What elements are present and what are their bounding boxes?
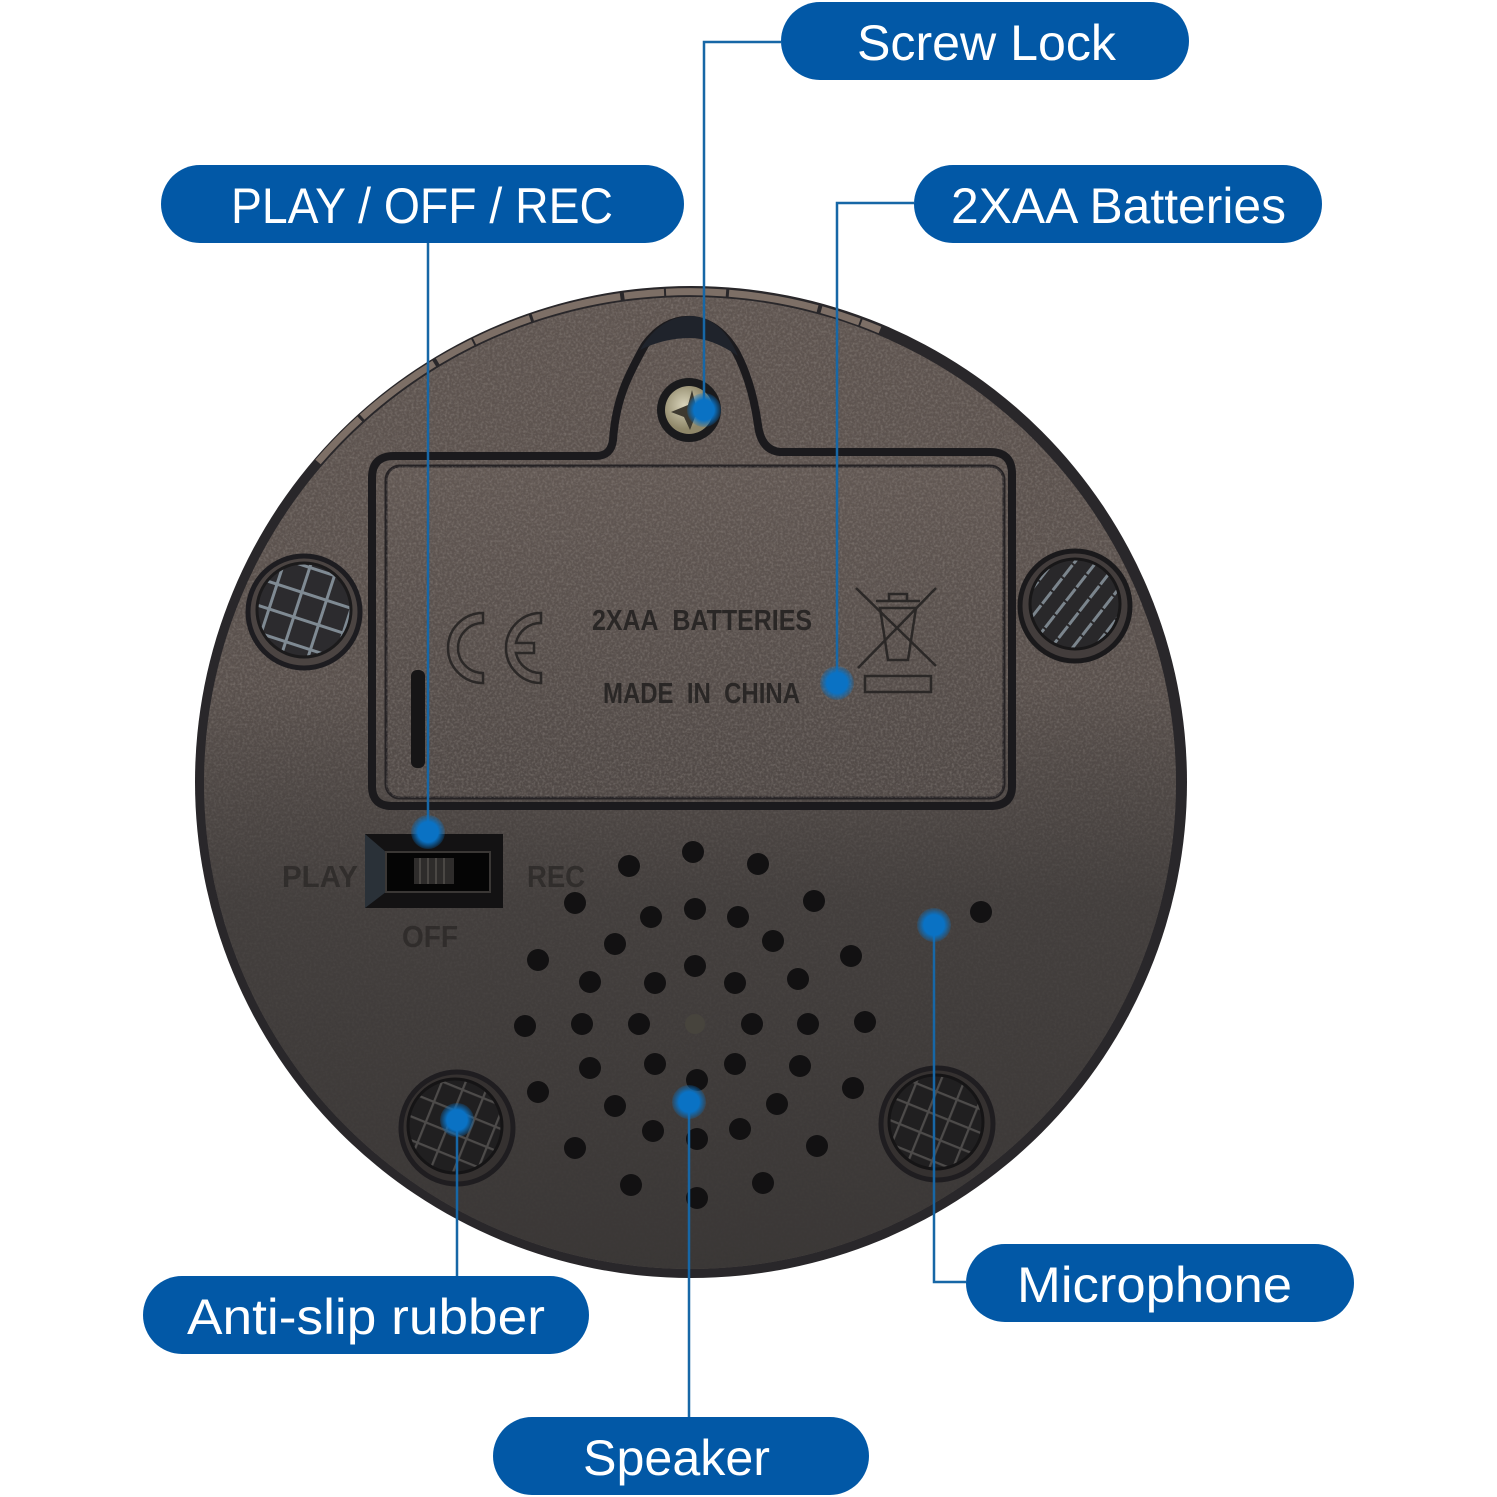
rubber foot: bottom right bbox=[881, 1068, 993, 1180]
mode switch: OFF bbox=[402, 919, 458, 954]
callout: Screw Lock bbox=[687, 2, 1189, 427]
icon: crossed-out bin bbox=[856, 588, 936, 692]
door slot bbox=[411, 670, 425, 768]
CE mark bbox=[448, 613, 541, 683]
callout: Microphone: Microphone bbox=[1017, 1257, 1292, 1313]
device back panel bbox=[195, 286, 1187, 1278]
rim highlight bbox=[318, 292, 880, 462]
surface texture bbox=[204, 297, 1176, 1269]
battery compartment groove bbox=[372, 320, 1012, 806]
callout: Screw Lock: Screw Lock bbox=[857, 15, 1117, 71]
mode switch: PLAY bbox=[282, 859, 358, 894]
callout: Anti-slip rubber bbox=[143, 1103, 589, 1354]
mode switch: REC bbox=[527, 859, 585, 894]
base plate bbox=[204, 297, 1176, 1269]
callout: Speaker bbox=[493, 1085, 869, 1495]
callout: 2XAA Batteries: 2XAA Batteries bbox=[951, 178, 1286, 234]
rubber foot: top left bbox=[248, 556, 360, 668]
callout: 2XAA Batteries bbox=[820, 165, 1322, 700]
microphone hole bbox=[970, 901, 992, 923]
screw tab crescent bbox=[640, 316, 738, 356]
callout: Microphone bbox=[917, 908, 1354, 1322]
callout: PLAY / OFF / REC: PLAY / OFF / REC bbox=[231, 178, 613, 234]
screw bbox=[657, 378, 721, 442]
battery door bbox=[386, 466, 1004, 798]
outer rim bbox=[195, 286, 1187, 1278]
battery door: MADE IN CHINA bbox=[603, 678, 800, 710]
callout: PLAY / OFF / REC bbox=[161, 165, 684, 849]
callout: Anti-slip rubber: Anti-slip rubber bbox=[187, 1289, 545, 1345]
rubber foot: top right bbox=[1020, 551, 1130, 661]
speaker grille bbox=[514, 841, 876, 1209]
mode switch bbox=[282, 834, 585, 954]
embossed text: 2XAA BATTERIES bbox=[592, 605, 812, 637]
lower shade bbox=[204, 297, 1176, 1269]
rubber foot: bottom left bbox=[401, 1072, 513, 1184]
callout: Speaker: Speaker bbox=[583, 1430, 770, 1486]
